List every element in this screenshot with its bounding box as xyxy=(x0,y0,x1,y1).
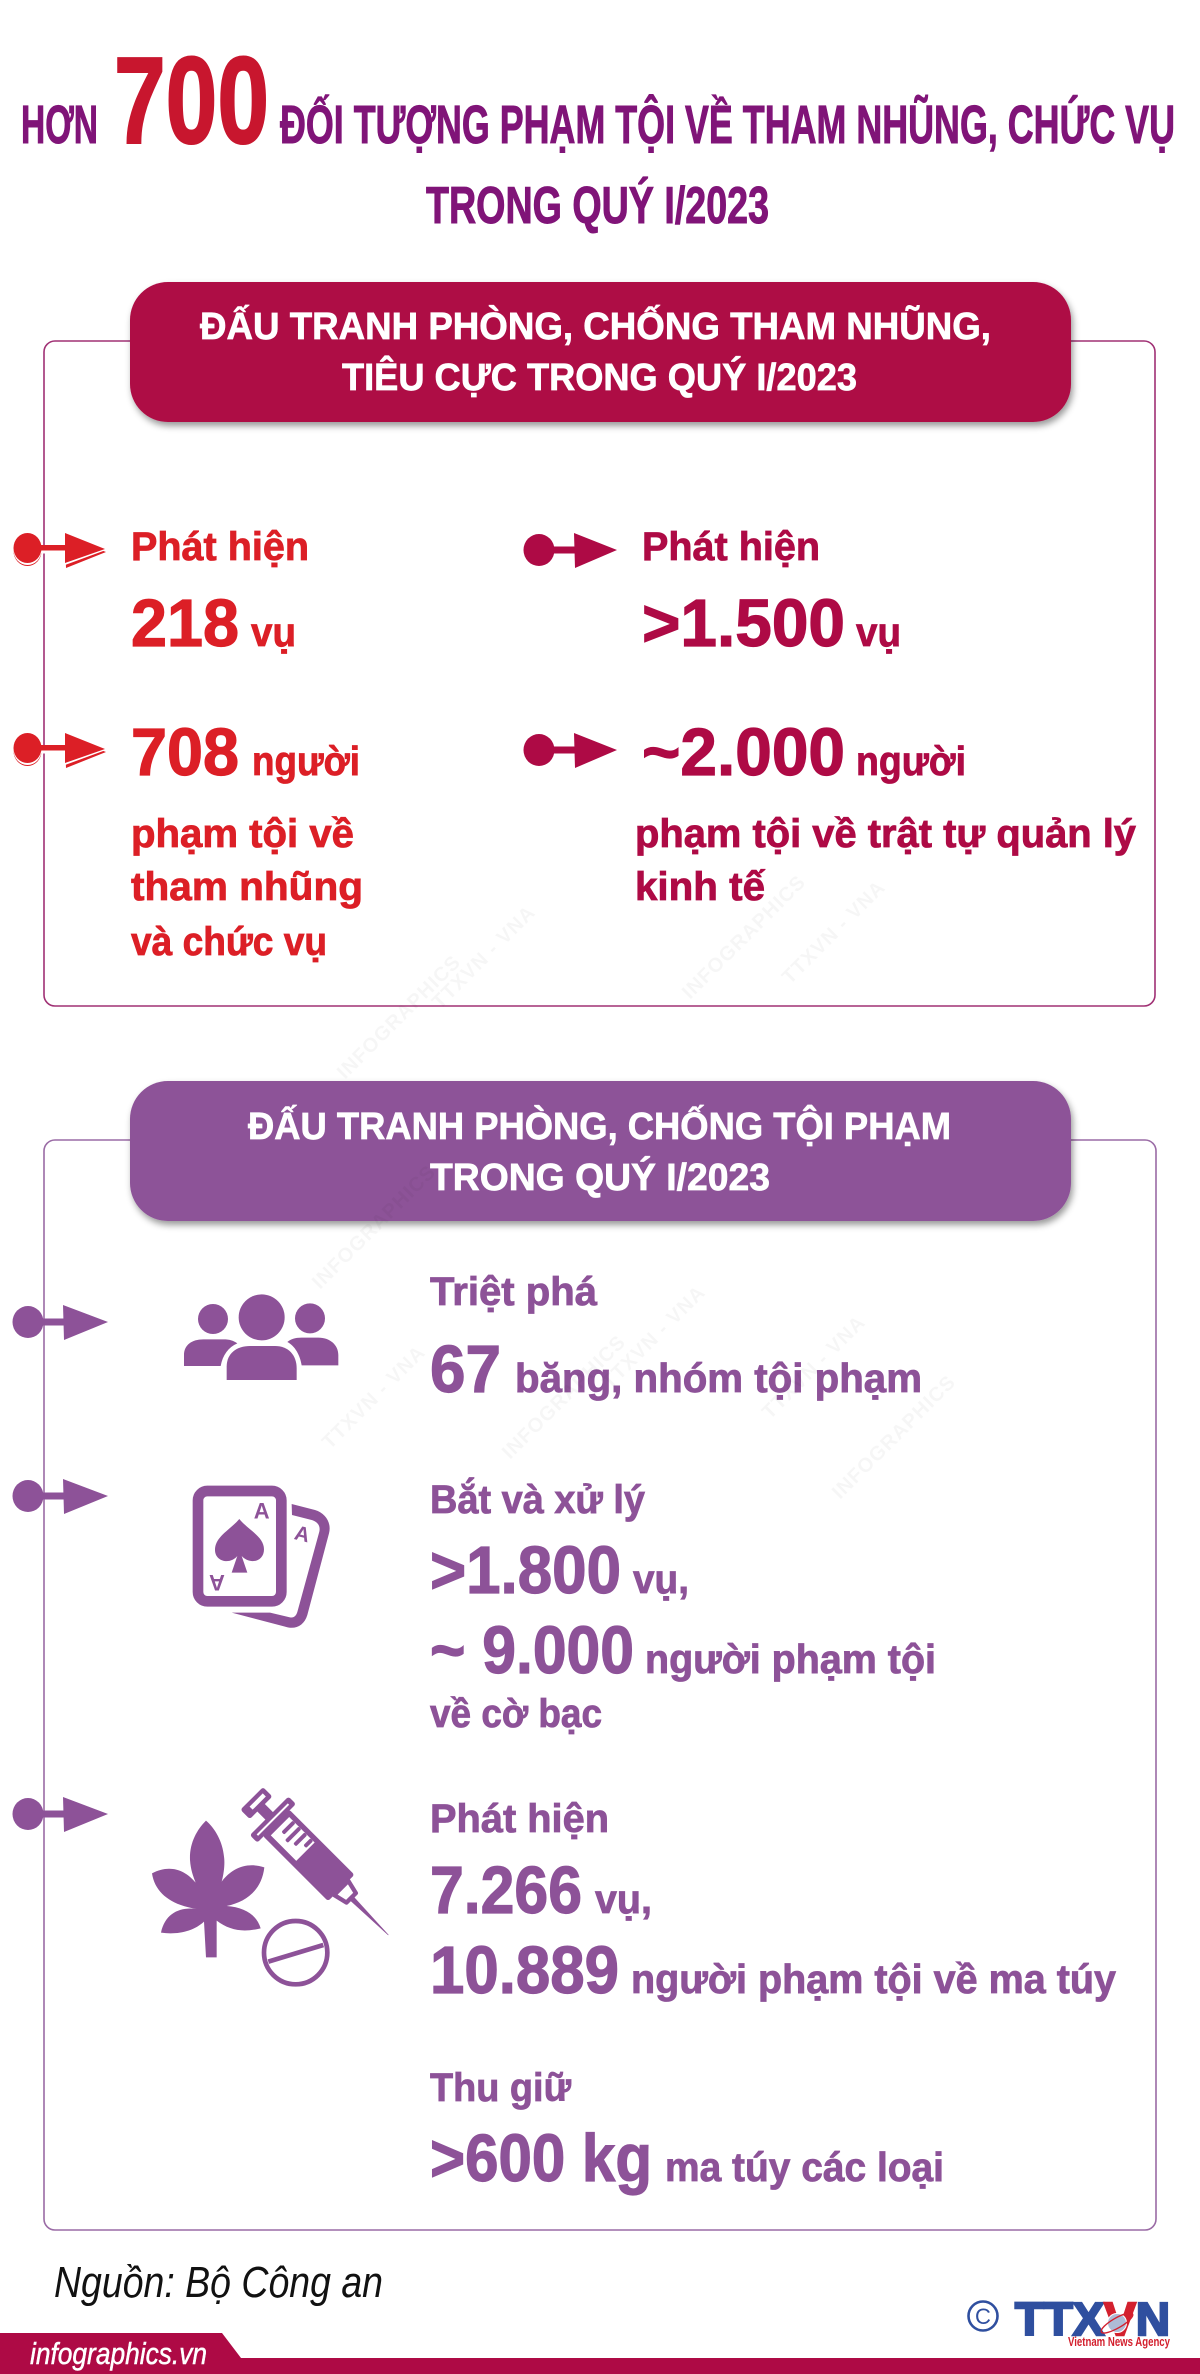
stat: 218 cases xyxy=(131,525,309,661)
stat: about 2000 people: người xyxy=(856,738,966,784)
text: INFOGRAPHICS xyxy=(678,871,810,1004)
panel frame: corruption xyxy=(44,341,1155,1006)
stat: over 1500 cases: Phát hiện xyxy=(642,525,820,569)
arrow: red 2 xyxy=(14,733,106,768)
text: INFOGRAPHICS xyxy=(498,1331,630,1464)
source: Nguồn: Bộ Công an xyxy=(54,2258,383,2307)
panel frame: crime xyxy=(44,1140,1156,2230)
stat: 67 gangs: 67 xyxy=(430,1332,501,1407)
stat: seized drugs xyxy=(430,2066,944,2196)
stat: about 2000 people: phạm tội về trật tự quản lý xyxy=(635,812,1137,856)
title: TRONG QUÝ I/2023 xyxy=(426,176,769,235)
stat: 218 cases: vụ xyxy=(251,609,296,655)
heading: corruption xyxy=(130,282,1071,422)
stat: 708 people: và chức vụ xyxy=(131,920,327,964)
title xyxy=(21,33,1175,235)
stat: about 2000 people xyxy=(635,715,1137,909)
icon: playing cards: A xyxy=(292,1521,312,1547)
icon: pill xyxy=(264,1921,327,1984)
stat: seized drugs: Thu giữ xyxy=(430,2066,571,2110)
arrow: red 1 xyxy=(14,533,106,568)
stat: 218 cases: Phát hiện xyxy=(131,525,309,569)
stat: over 1500 cases: vụ xyxy=(856,609,901,655)
text: INFOGRAPHICS xyxy=(333,951,465,1084)
stat: drug cases: 10.889 xyxy=(430,1933,619,2008)
text: TTXVN - VNA xyxy=(598,1281,710,1394)
stat: gambling: vụ, xyxy=(633,1556,689,1602)
stat: 67 gangs: Triệt phá xyxy=(430,1270,598,1314)
heading: crime xyxy=(130,1081,1071,1221)
icon: cannabis leaf xyxy=(152,1821,264,1957)
stat: over 1500 cases: >1.500 xyxy=(642,586,845,661)
stat: 708 people: tham nhũng xyxy=(131,865,363,909)
stat: seized drugs: >600 kg xyxy=(430,2121,652,2196)
icon: playing cards: A xyxy=(209,1570,225,1595)
arrow: purple 1 xyxy=(12,1305,108,1340)
panel: corruption xyxy=(14,282,1155,1006)
arrow: crimson 1 xyxy=(524,533,617,568)
text: TTXVN - VNA xyxy=(778,876,890,989)
arrow: purple 2 xyxy=(12,1479,108,1514)
arrow: crimson 2 xyxy=(524,733,617,768)
icon: drugs xyxy=(152,1779,408,1984)
stat: 708 people: 708 xyxy=(131,715,239,790)
footer bar xyxy=(0,2333,1200,2374)
icon: playing cards xyxy=(198,1491,330,1628)
stat: gambling xyxy=(430,1476,936,1736)
stat: 708 people: phạm tội về xyxy=(131,812,354,856)
stat: drug cases: vụ, xyxy=(595,1876,652,1922)
stat: drug cases: 7.266 xyxy=(430,1853,582,1928)
arrow: purple 3 xyxy=(12,1797,108,1832)
text: TTXVN - VNA xyxy=(428,901,540,1014)
stat: 67 gangs xyxy=(430,1270,922,1407)
stat: gambling: >1.800 xyxy=(430,1533,621,1608)
stat: about 2000 people: kinh tế xyxy=(635,865,766,909)
footer bar: infographics.vn xyxy=(30,2336,207,2371)
stat: gambling: về cờ bạc xyxy=(430,1692,602,1736)
text: INFOGRAPHICS xyxy=(828,1371,960,1504)
text: TTXVN - VNA xyxy=(758,1311,870,1424)
stat: seized drugs: ma túy các loại xyxy=(665,2144,944,2190)
stat: over 1500 cases xyxy=(642,525,901,661)
icon: playing cards: A xyxy=(254,1498,270,1523)
logo: TTXVN: C xyxy=(975,2304,991,2329)
stat: drug cases xyxy=(430,1797,1116,2008)
heading: crime: ĐẤU TRANH PHÒNG, CHỐNG TỘI PHẠM xyxy=(248,1103,951,1148)
stat: drug cases: Phát hiện xyxy=(430,1797,609,1841)
title: HƠN xyxy=(21,95,98,155)
stat: about 2000 people: ~2.000 xyxy=(642,715,845,790)
logo: TTXVN: TTXVN xyxy=(1015,2293,1170,2345)
stat: gambling: người phạm tội xyxy=(645,1636,936,1682)
panel: crime xyxy=(12,1081,1156,2230)
text: TTXVN - VNA xyxy=(318,1341,430,1454)
heading: corruption: TIÊU CỰC TRONG QUÝ I/2023 xyxy=(342,355,857,399)
heading: crime: TRONG QUÝ I/2023 xyxy=(430,1155,770,1199)
text: INFOGRAPHICS xyxy=(308,1161,440,1294)
icon: group of people xyxy=(184,1294,338,1380)
stat: gambling: Bắt và xử lý xyxy=(430,1476,646,1522)
heading: corruption: ĐẤU TRANH PHÒNG, CHỐNG THAM NHŨNG, xyxy=(200,303,991,348)
stat: 708 people xyxy=(131,715,363,964)
title: 700 xyxy=(114,33,269,170)
icon: syringe xyxy=(232,1779,408,1954)
stat: gambling: ~ 9.000 xyxy=(430,1613,634,1688)
stat: 67 gangs: băng, nhóm tội phạm xyxy=(515,1355,922,1401)
stat: drug cases: người phạm tội về ma túy xyxy=(631,1956,1116,2002)
stat: 218 cases: 218 xyxy=(131,586,239,661)
stat: 708 people: người xyxy=(252,738,360,784)
